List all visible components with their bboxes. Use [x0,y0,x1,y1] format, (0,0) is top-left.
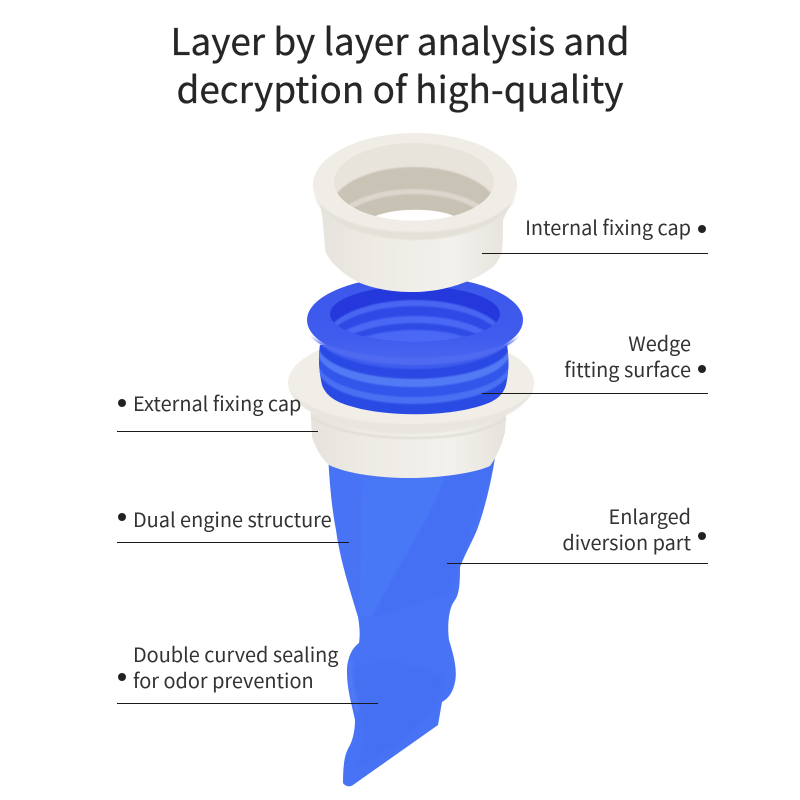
label: external fixing cap: External fixing cap [133,388,301,417]
external fixing cap [288,333,534,478]
label: internal fixing cap: Internal fixing cap [525,212,691,241]
label: enlarged diversion part [447,501,708,564]
label: enlarged diversion part: Enlarged [609,501,691,530]
title [170,12,630,114]
blue flange [307,282,523,365]
blue threaded neck [318,345,508,414]
label: wedge fitting surface: Wedge [628,328,691,357]
label: wedge fitting surface: fitting surface [564,354,691,383]
label: double curved sealing [117,639,378,704]
blue silicone tail [328,450,500,786]
product: drain seal illustration [288,133,534,786]
internal fixing cap [313,133,517,292]
label: external fixing cap [117,388,318,432]
label: wedge fitting surface [482,328,708,394]
label: dual engine structure [117,504,349,542]
label: double curved sealing: for odor prevention [133,665,314,694]
title: Layer by layer analysis and [170,12,630,66]
label: double curved sealing: Double curved sealing [133,639,339,668]
label: dual engine structure: Dual engine structure [133,504,332,533]
title: decryption of high-quality [176,60,624,114]
label: internal fixing cap [482,212,708,254]
label: enlarged diversion part: diversion part [562,527,691,556]
